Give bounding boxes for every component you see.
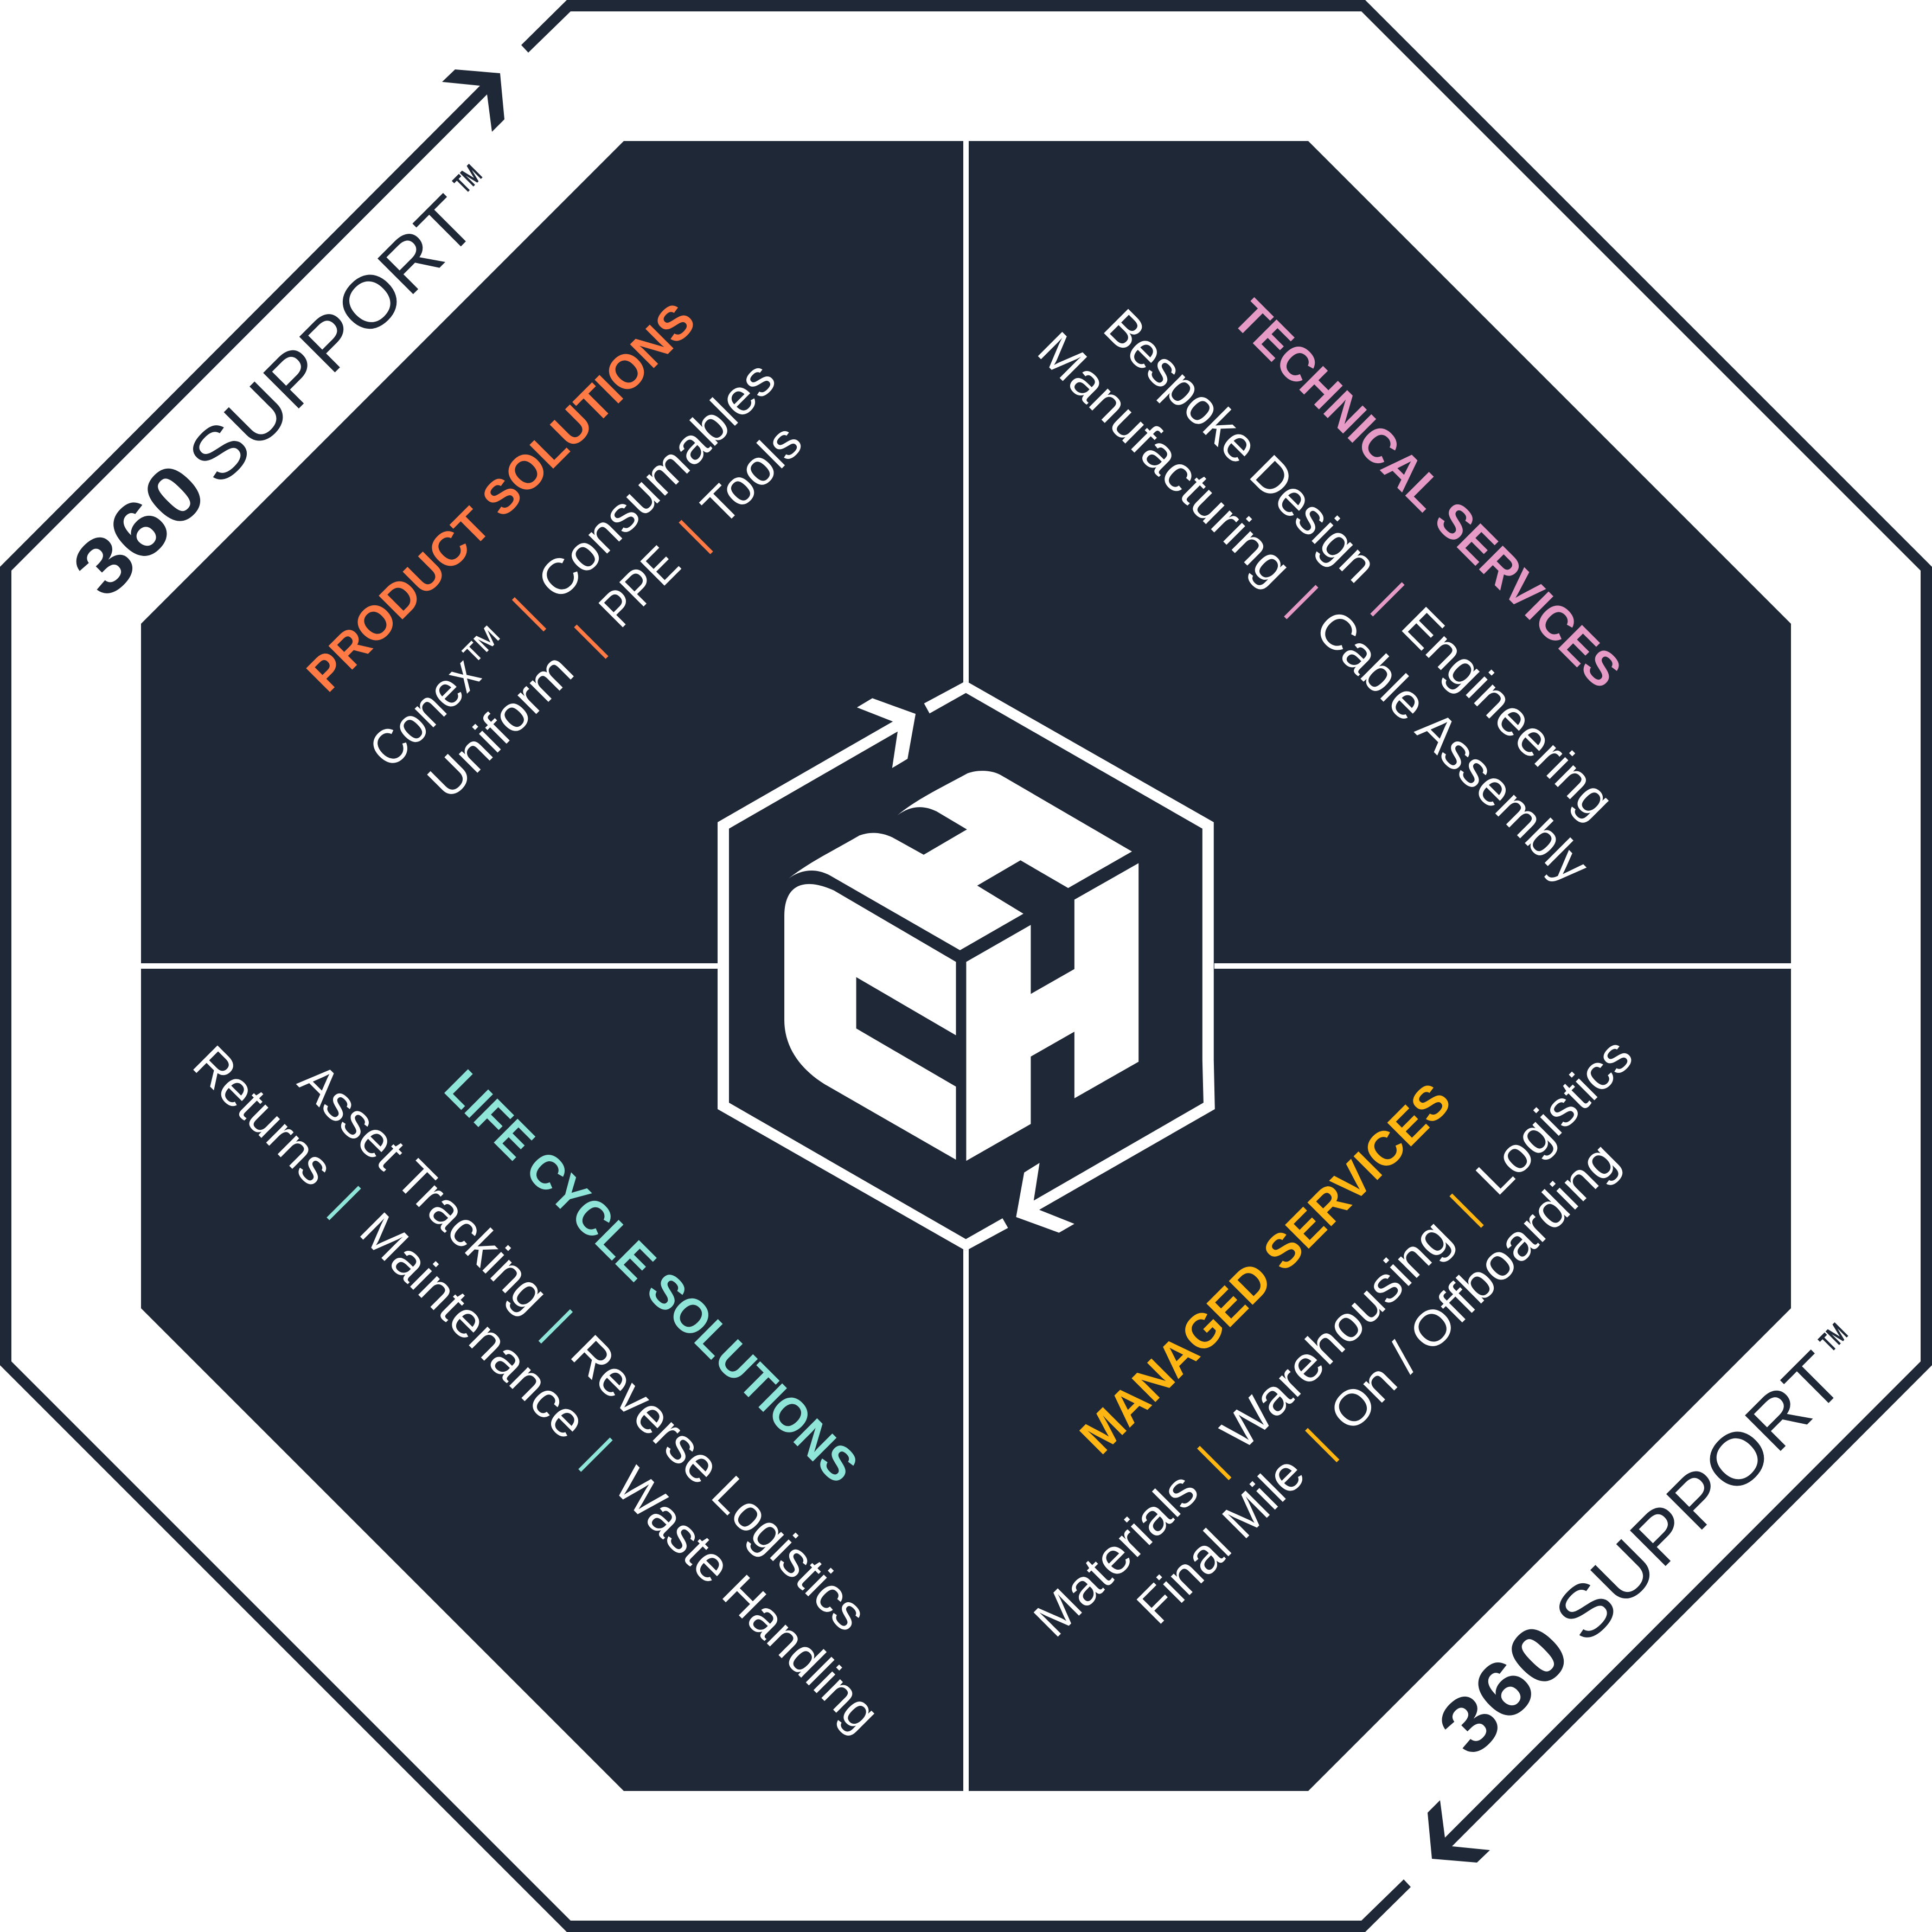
hexagon arrow: left side [718,698,1008,1251]
separator: | [565,615,612,662]
hexagon arrow: right side [924,681,1215,1233]
heading: technical services: TECHNICAL SERVICES [1223,290,1632,699]
separator: | [575,1428,622,1475]
separator: | [1367,573,1414,620]
hexagon backing [718,681,1215,1251]
heading: life cycle solutions: LIFE CYCLE SOLUTIONS [434,1060,868,1493]
item: maintenance: Maintenance [349,1202,597,1450]
item: returns: Returns [183,1035,343,1196]
panel: product solutions [141,141,963,963]
item: on / offboarding: On / Offboarding [1320,1131,1629,1442]
separator: | [1440,1184,1487,1231]
separator: | [1281,575,1328,623]
trademark: ™ [443,155,503,214]
heading: product solutions: PRODUCT SOLUTIONS [297,293,706,702]
logo: H face [966,863,1138,1161]
separator: | [535,1300,582,1347]
word: support: SUPPORT [1539,1337,1859,1658]
item: final mile: Final Mile [1127,1445,1315,1634]
separator: | [1188,1437,1234,1483]
separator: | [323,1176,370,1224]
item: manufacturing: Manufacturing [1027,322,1302,596]
trademark: ™ [1809,1314,1869,1373]
item: ppe: PPE [589,536,690,637]
item: consumables: Consumables [527,351,786,610]
panel: life cycle solutions [141,969,963,1791]
logo: top face [789,771,1132,950]
item: waste handling: Waste Handling [604,1457,890,1742]
item: asset tracking: Asset Tracking [288,1053,559,1323]
item: cable assembly: Cable Assembly [1305,599,1600,894]
heading: managed services: MANAGED SERVICES [1070,1073,1461,1464]
label: 360 support bottom right [1421,1314,1869,1772]
item: tools: Tools [691,414,813,535]
center emblem: hexagon with cube logo [718,681,1215,1251]
number: 360: 360 [1421,1607,1586,1772]
label: 360 support top left [55,155,503,613]
item: reverse logistics: Reverse Logistics [560,1325,877,1642]
item: bespoke design: Bespoke Design [1093,299,1387,593]
item: conex: Conex™ [359,615,522,778]
separator: | [503,588,549,635]
item: logistics: Logistics [1466,1028,1643,1205]
item: engineering: Engineering [1391,597,1624,829]
word: support: SUPPORT [172,181,491,500]
item: materials: Materials [1023,1462,1209,1647]
separator: | [1296,1419,1342,1466]
item: uniform: Uniform [417,643,584,809]
outer octagon arrow: left and bottom with upper-left arrowhead [0,69,1411,1932]
item: warehousing: Warehousing [1211,1208,1462,1460]
panel: technical services [969,141,1791,963]
panel: managed services [969,969,1791,1791]
separator: | [669,510,716,558]
number: 360: 360 [55,446,223,613]
outer octagon arrow: top and right with lower-right arrowhead [521,0,1932,1863]
logo: C face [784,884,956,1160]
